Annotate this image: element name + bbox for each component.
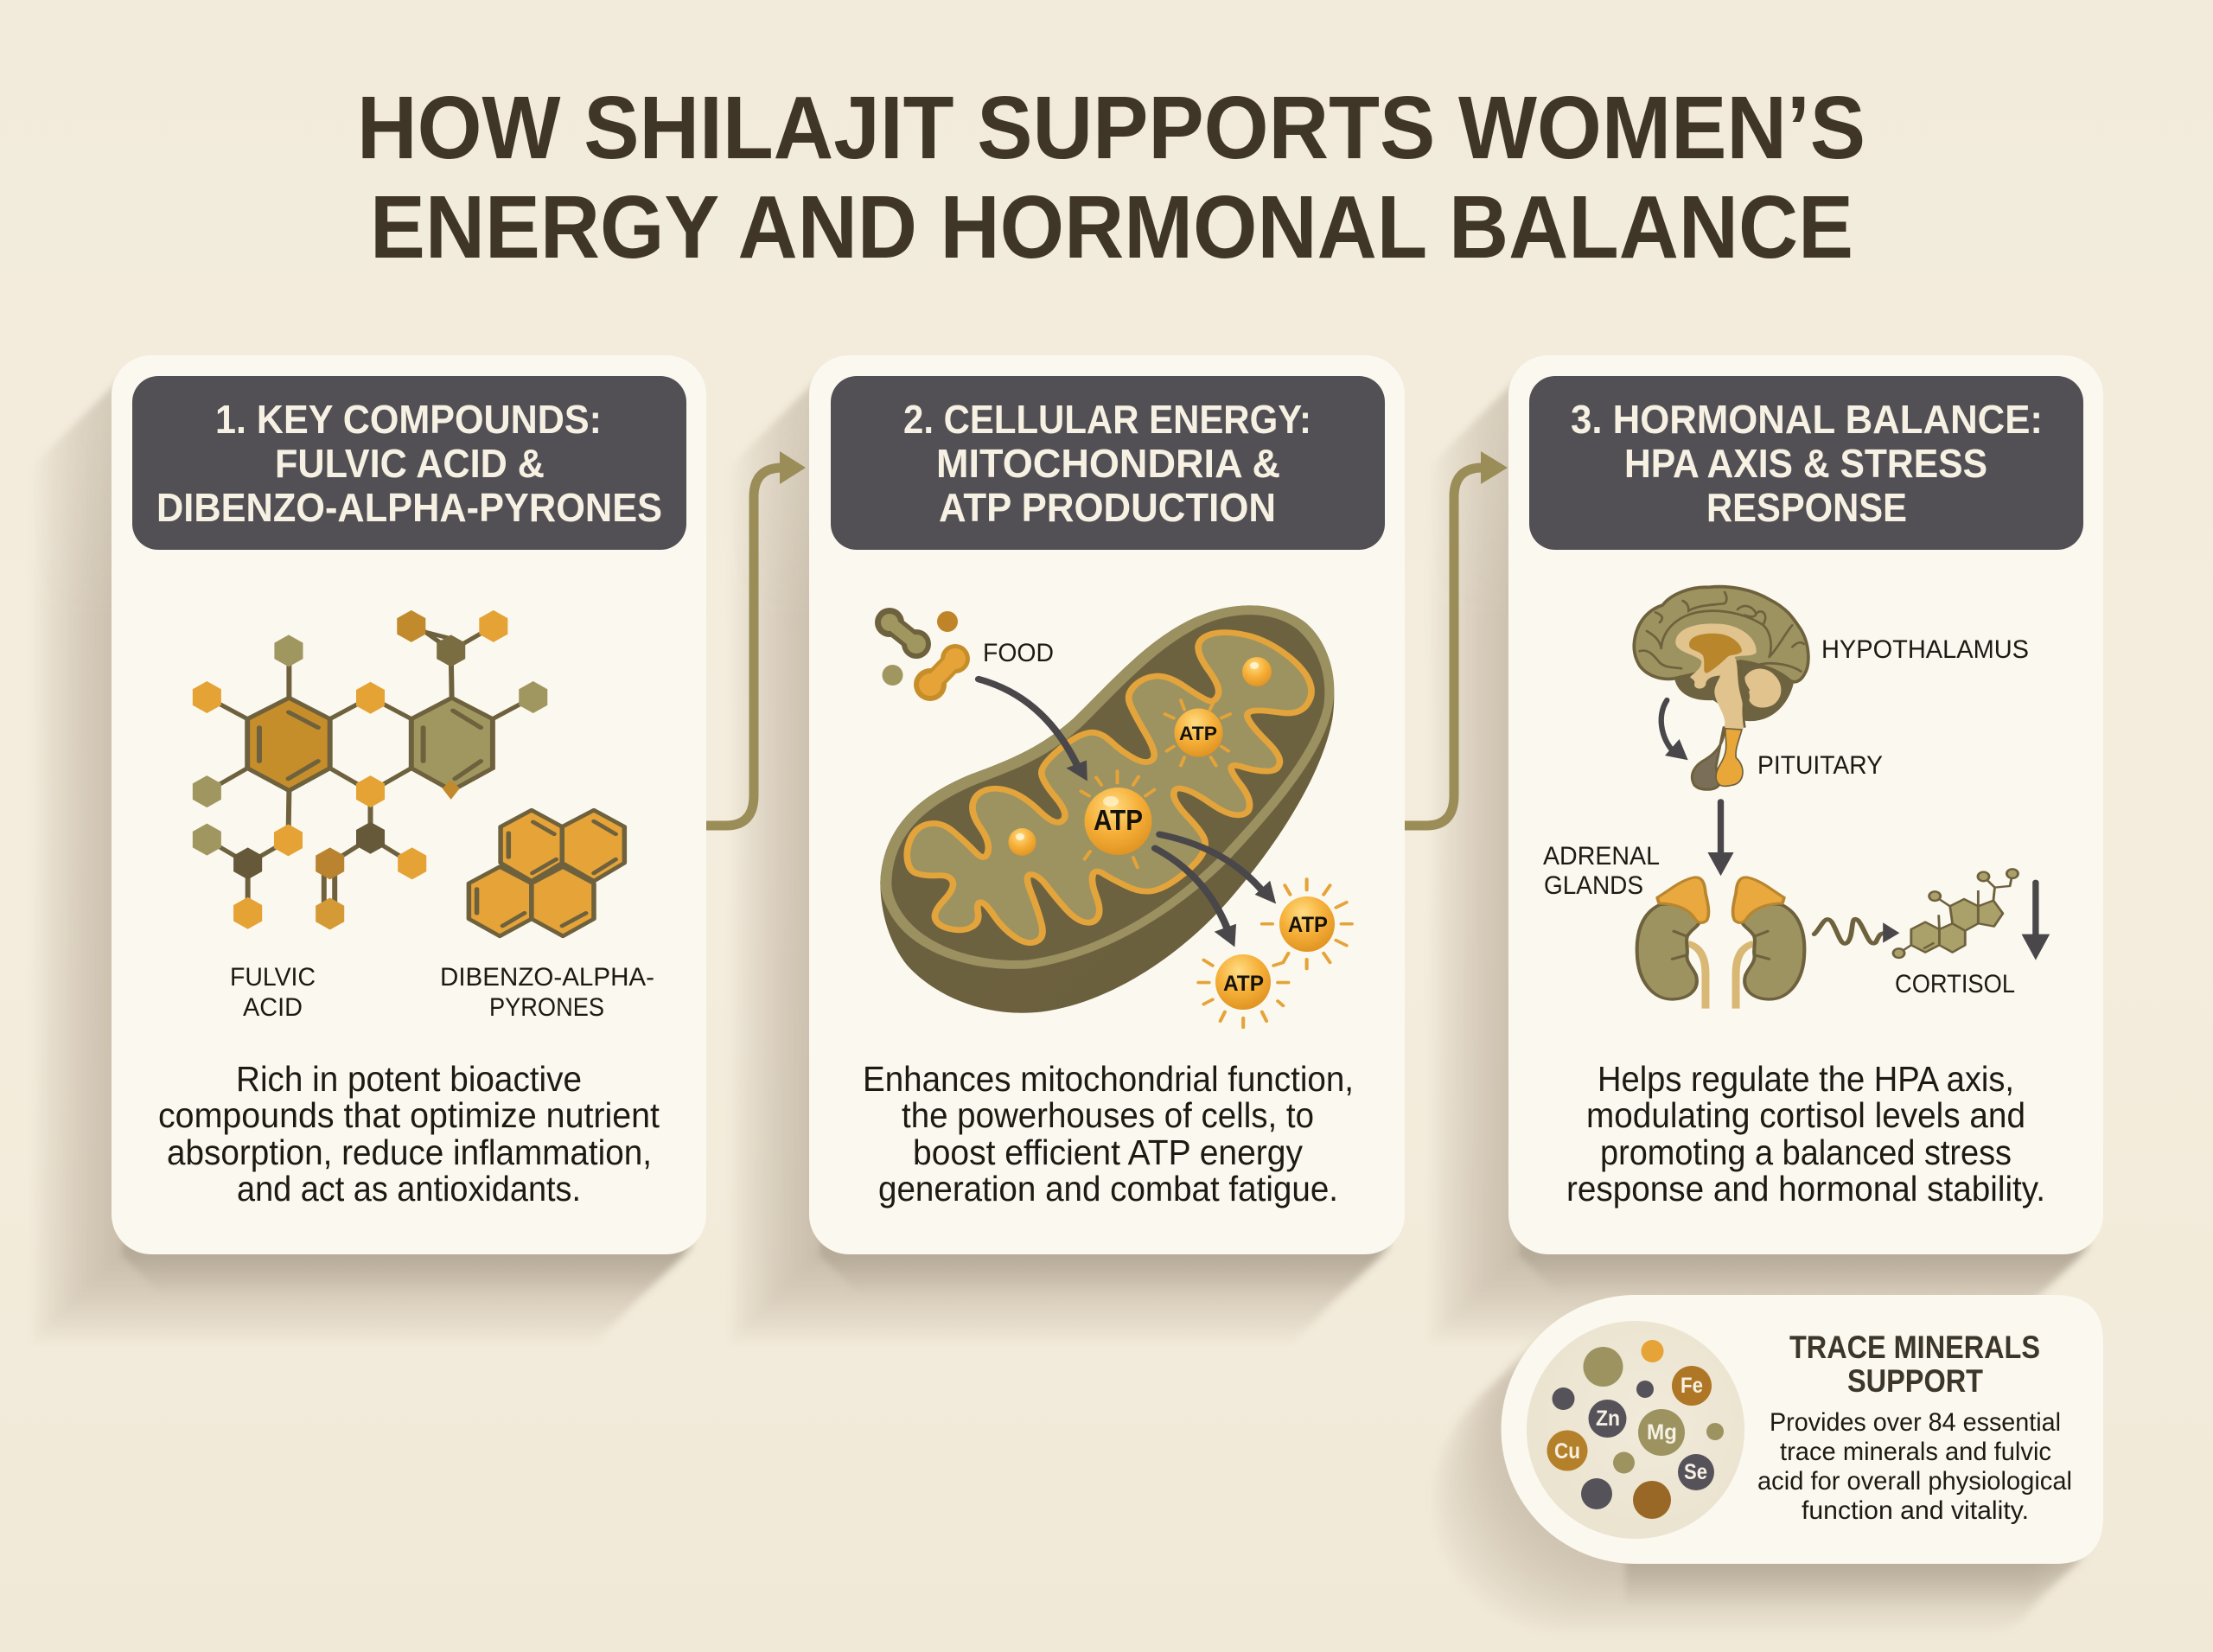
icon: mineral dish: Cu <box>1554 1439 1580 1464</box>
icon: mineral dish: Mg <box>1647 1420 1677 1445</box>
text block: trace minerals description: acid for overall physiological <box>1757 1467 2072 1496</box>
icon: dibenzo-alpha-pyrone molecule <box>469 810 624 936</box>
icon: ATP sphere top <box>1174 709 1222 757</box>
heading: key compounds <box>132 376 686 550</box>
text block: hormonal balance description: response and hormonal stability. <box>1566 1169 2045 1209</box>
heading: key compounds: 1. KEY COMPOUNDS: <box>215 397 602 442</box>
label: dibenzo-alpha-pyrones: DIBENZO-ALPHA- <box>440 963 654 992</box>
panel: key compounds <box>112 355 706 1254</box>
arrow: cortisol decrease <box>2022 883 2050 960</box>
icon: ATP sphere main: ATP <box>1094 804 1143 836</box>
heading: hormonal balance: 3. HORMONAL BALANCE: <box>1571 397 2043 442</box>
label: dibenzo-alpha-pyrones: PYRONES <box>489 993 604 1022</box>
text block: key compounds description: absorption, reduce inflammation, <box>167 1132 652 1172</box>
title: ENERGY AND HORMONAL BALANCE <box>370 177 1853 277</box>
text block: hormonal balance description <box>1566 1059 2045 1209</box>
label: dibenzo-alpha-pyrones <box>440 963 654 1022</box>
text block: trace minerals description: trace minerals and fulvic <box>1780 1438 2051 1466</box>
heading: cellular energy <box>831 376 1385 550</box>
arrow: ATP output bottom <box>1155 848 1236 947</box>
label: adrenal glands: GLANDS <box>1544 871 1643 900</box>
text block: cellular energy description: boost efficient ATP energy <box>913 1132 1303 1172</box>
arrow: food into mitochondrion <box>979 679 1087 781</box>
text block: cellular energy description: generation and combat fatigue. <box>878 1169 1338 1209</box>
icon: fulvic acid molecule <box>193 610 547 929</box>
icon: ATP sphere right: ATP <box>1288 913 1328 937</box>
heading: trace minerals support: SUPPORT <box>1847 1363 1983 1399</box>
label: food: FOOD <box>983 639 1054 667</box>
icon: mitochondrion <box>880 605 1334 1013</box>
text block: key compounds description: compounds that optimize nutrient <box>158 1095 660 1135</box>
text block: hormonal balance description: modulating cortisol levels and <box>1586 1095 2025 1135</box>
icon: brain <box>1634 587 1808 729</box>
heading: trace minerals support <box>1789 1330 2040 1399</box>
label: cortisol: CORTISOL <box>1895 970 2015 998</box>
heading: hormonal balance <box>1529 376 2083 550</box>
heading: cellular energy: 2. CELLULAR ENERGY: <box>903 397 1311 442</box>
label: pituitary: PITUITARY <box>1757 751 1883 780</box>
text block: cellular energy description: the powerhouses of cells, to <box>902 1095 1314 1135</box>
text block: cellular energy description: Enhances mitochondrial function, <box>863 1059 1354 1099</box>
heading: cellular energy: ATP PRODUCTION <box>939 485 1276 530</box>
arrow: card 1 to card 2 <box>705 451 806 826</box>
heading: cellular energy: MITOCHONDRIA & <box>936 441 1280 486</box>
heading: hormonal balance: RESPONSE <box>1706 485 1907 530</box>
icon: ATP sphere top: ATP <box>1179 723 1217 744</box>
icon: adrenal glands and kidneys <box>1637 877 1804 1009</box>
text block: cellular energy description <box>863 1059 1354 1209</box>
icon: mineral dish: Fe <box>1680 1374 1703 1398</box>
icon: ATP sphere right <box>1262 879 1352 969</box>
text block: hormonal balance description: Helps regulate the HPA axis, <box>1598 1059 2014 1099</box>
text block: trace minerals description: function and vitality. <box>1802 1496 2029 1525</box>
icon: ATP sphere main <box>1084 788 1151 855</box>
title <box>357 78 1865 277</box>
icon: mineral dish: Zn <box>1596 1406 1620 1431</box>
panel: hormonal balance <box>1508 355 2103 1254</box>
heading: key compounds: FULVIC ACID & <box>275 441 545 486</box>
heading: key compounds: DIBENZO-ALPHA-PYRONES <box>156 485 662 530</box>
icon: food particles <box>875 608 970 701</box>
label: fulvic acid: FULVIC <box>230 963 316 992</box>
title: HOW SHILAJIT SUPPORTS WOMEN’S <box>357 78 1865 177</box>
heading: trace minerals support: TRACE MINERALS <box>1789 1330 2040 1365</box>
arrow: ATP output right <box>1159 834 1276 904</box>
text block: trace minerals description: Provides over 84 essential <box>1770 1408 2061 1437</box>
panel: cellular energy <box>809 355 1405 1254</box>
label: adrenal glands: ADRENAL <box>1543 842 1660 871</box>
icon: mineral dish: Se <box>1684 1460 1707 1484</box>
icon: small energy spheres <box>1008 657 1272 856</box>
icon: mineral dish <box>1527 1321 1744 1539</box>
label: fulvic acid <box>230 963 316 1022</box>
icon: ATP sphere bottom <box>1198 954 1288 1027</box>
arrow: card 2 to card 3 <box>1403 451 1508 826</box>
label: hypothalamus: HYPOTHALAMUS <box>1821 635 2029 664</box>
text block: trace minerals description <box>1757 1408 2072 1525</box>
arrow: hypothalamus to pituitary <box>1661 700 1688 760</box>
text block: key compounds description <box>158 1059 660 1209</box>
text block: key compounds description: and act as antioxidants. <box>237 1169 581 1209</box>
arrow: pituitary to adrenal glands <box>1707 801 1734 876</box>
label: adrenal glands <box>1543 842 1660 900</box>
arrow: wavy release signal <box>1814 919 1899 943</box>
icon: pituitary gland <box>1692 728 1743 789</box>
text block: key compounds description: Rich in potent bioactive <box>236 1059 582 1099</box>
panel: trace minerals callout <box>1501 1295 2103 1564</box>
icon: cortisol molecule <box>1893 869 2018 958</box>
text block: hormonal balance description: promoting a balanced stress <box>1600 1132 2012 1172</box>
heading: hormonal balance: HPA AXIS & STRESS <box>1624 441 1987 486</box>
icon: ATP sphere bottom: ATP <box>1223 972 1264 996</box>
label: fulvic acid: ACID <box>243 993 303 1022</box>
